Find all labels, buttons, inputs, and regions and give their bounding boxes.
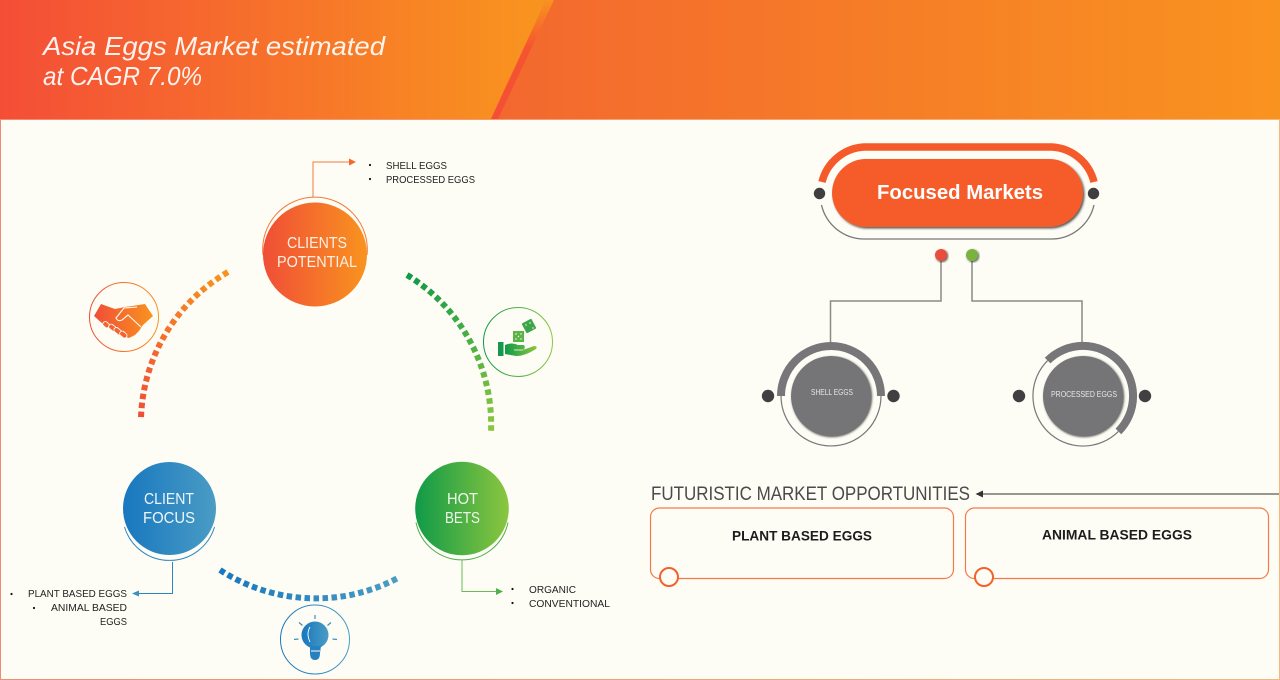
header banner (0, 0, 1280, 119)
node: client focus: CLIENT (144, 491, 194, 508)
list: client focus: EGGS (100, 616, 127, 628)
arrow: client focus to list (132, 562, 172, 596)
card: animal based eggs: ANIMAL BASED EGGS (1042, 526, 1192, 542)
title: at CAGR 7.0% (43, 61, 202, 91)
node: clients potential: CLIENTS (287, 235, 347, 252)
list: hot bets: CONVENTIONAL (529, 598, 610, 610)
dotted arc: orange (141, 272, 228, 418)
list: clients potential (369, 160, 475, 186)
node: clients potential (263, 197, 367, 306)
focused markets badge (814, 147, 1099, 239)
focused markets badge: Focused Markets (877, 182, 1043, 204)
dotted arc: green (407, 275, 491, 432)
list: clients potential: PROCESSED EGGS (386, 174, 475, 186)
node: processed eggs (1013, 346, 1151, 446)
list: hot bets (511, 584, 610, 610)
node: shell eggs: SHELL EGGS (811, 388, 853, 397)
icon: dice in hand (484, 308, 552, 376)
list: client focus: ANIMAL BASED (51, 602, 127, 614)
icon: handshake (90, 282, 158, 352)
node: client focus: FOCUS (143, 510, 195, 527)
list: client focus (10, 588, 127, 628)
card: plant based eggs (650, 508, 954, 586)
card: animal based eggs (966, 508, 1268, 586)
connector: focused markets to processed eggs (966, 249, 1082, 343)
node: hot bets: HOT (447, 491, 478, 508)
node: shell eggs (762, 346, 900, 446)
card: plant based eggs: PLANT BASED EGGS (732, 528, 872, 544)
node: hot bets (415, 462, 509, 560)
arrow: into heading (976, 490, 1279, 498)
title (41, 31, 387, 91)
arrow: clients potential to list (313, 158, 356, 197)
node: processed eggs: PROCESSED EGGS (1051, 390, 1117, 399)
list: client focus: PLANT BASED EGGS (28, 588, 127, 600)
node: client focus (123, 462, 216, 560)
dotted arc: blue (220, 570, 398, 598)
connector: focused markets to shell eggs (830, 249, 947, 343)
node: hot bets: BETS (445, 510, 480, 527)
title: Asia Eggs Market estimated (41, 31, 387, 61)
list: hot bets: ORGANIC (529, 584, 576, 596)
list: clients potential: SHELL EGGS (386, 160, 447, 172)
node: clients potential: POTENTIAL (277, 254, 357, 271)
icon: light bulb (280, 605, 350, 674)
arrow: hot bets to list (462, 560, 503, 595)
heading: futuristic market opportunities: FUTURISTIC MARKET OPPORTUNITIES (651, 484, 970, 505)
